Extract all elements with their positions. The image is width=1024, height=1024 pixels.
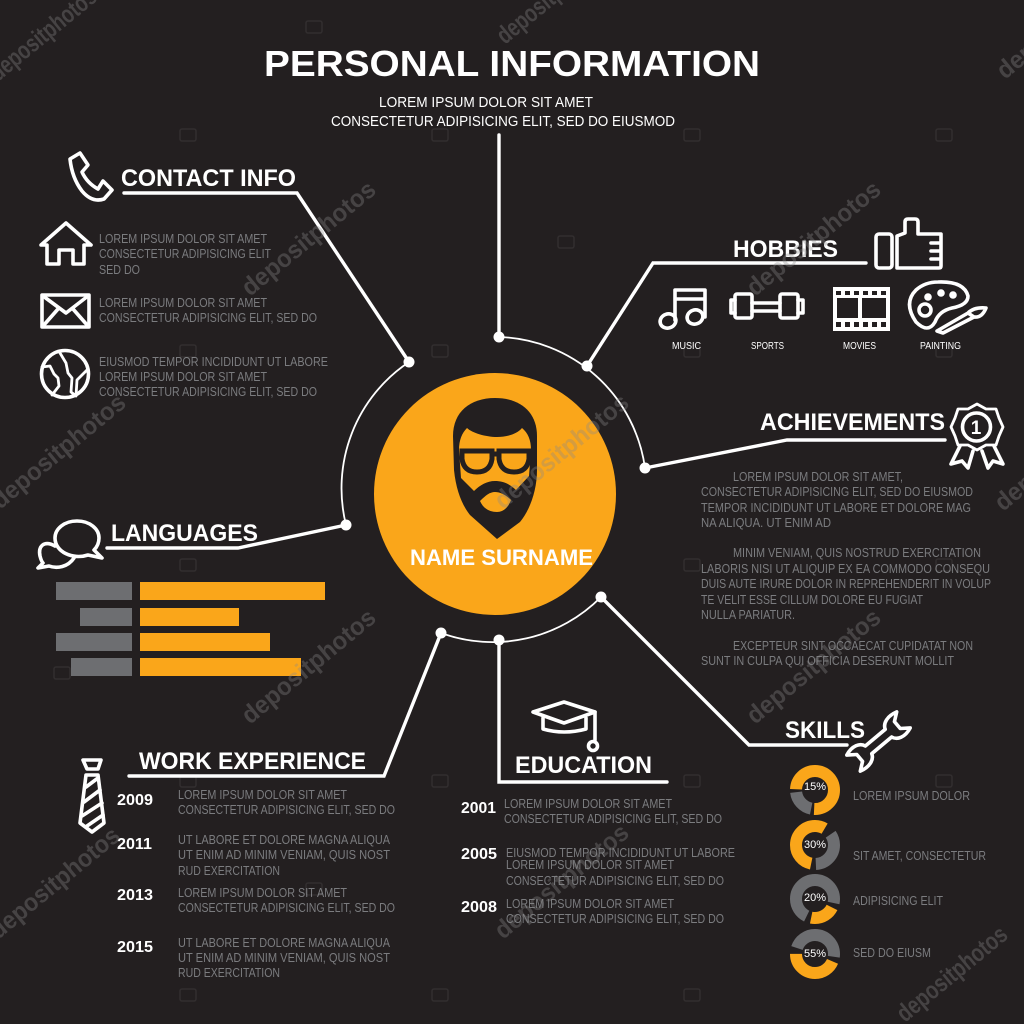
work descriptions: UT ENIM AD MINIM VENIAM, QUIS NOST: [178, 848, 390, 862]
donut chart: 55%: 55%: [804, 948, 826, 960]
connector ring arcs: [342, 337, 645, 642]
education years: 2005: [461, 846, 497, 863]
watermark text: depositphotos: [489, 388, 634, 515]
web text: LOREM IPSUM DOLOR SIT AMET: [99, 370, 267, 384]
heading: hobbies: HOBBIES: [733, 236, 838, 263]
icon: wrench: [845, 711, 912, 772]
panel: skills: [785, 711, 986, 973]
achievements text: SUNT IN CULPA QUI OFFICIA DESERUNT MOLLIT: [701, 654, 954, 668]
connector dots: [340, 332, 650, 646]
hobby labels: SPORTS: [751, 341, 784, 352]
donut chart: 20%: [796, 880, 834, 918]
address text: SED DO: [99, 263, 140, 277]
education descriptions: LOREM IPSUM DOLOR SIT AMET: [506, 897, 674, 911]
achievements text: CONSECTETUR ADIPISICING ELIT, SED DO EIUSMOD: [701, 485, 973, 499]
connector lines: [107, 135, 945, 782]
education descriptions: LOREM IPSUM DOLOR SIT AMET: [506, 858, 674, 872]
heading: achievements: ACHIEVEMENTS: [760, 409, 945, 436]
icon: dumbbell: [731, 294, 803, 318]
heading: work experience: WORK EXPERIENCE: [139, 748, 366, 775]
donut chart: 55%: [796, 935, 834, 973]
achievements text: NA ALIQUA. UT ENIM AD: [701, 516, 831, 530]
work descriptions: UT LABORE ET DOLORE MAGNA ALIQUA: [178, 833, 391, 847]
heading: contact info: CONTACT INFO: [121, 165, 296, 192]
education years: 2001: [461, 800, 496, 817]
work years: 2009: [117, 792, 153, 809]
heading: skills: SKILLS: [785, 717, 865, 744]
skill labels: SED DO EIUSM: [853, 946, 931, 960]
icon: phone: [70, 153, 112, 200]
address text: LOREM IPSUM DOLOR SIT AMET: [99, 232, 267, 246]
heading: languages: LANGUAGES: [111, 520, 258, 547]
email text: LOREM IPSUM DOLOR SIT AMET: [99, 296, 267, 310]
work years: 2011: [117, 836, 152, 853]
donut chart: 20%: 20%: [804, 892, 826, 904]
icon: thumbs up: [876, 219, 941, 268]
work descriptions: LOREM IPSUM DOLOR SIT AMET: [178, 886, 347, 900]
achievements text: LABORIS NISI UT ALIQUIP EX EA COMMODO CONSEQU: [701, 562, 990, 576]
icon: palette and brush: [910, 282, 986, 333]
panel: contact info: [41, 153, 328, 399]
web text: CONSECTETUR ADIPISICING ELIT, SED DO: [99, 385, 317, 399]
icon: bearded man with glasses: [453, 398, 537, 539]
education descriptions: CONSECTETUR ADIPISICING ELIT, SED DO: [506, 874, 724, 888]
skill labels: ADIPISICING ELIT: [853, 894, 943, 908]
watermark text: depositphotos: [489, 818, 634, 945]
achievements text: [701, 470, 991, 668]
watermark text: depositphotos: [741, 603, 886, 730]
work descriptions: CONSECTETUR ADIPISICING ELIT, SED DO: [178, 901, 395, 915]
work descriptions: UT LABORE ET DOLORE MAGNA ALIQUA: [178, 936, 391, 950]
work descriptions: RUD EXERCITATION: [178, 864, 280, 878]
work years: [117, 792, 153, 956]
hobby labels: PAINTING: [920, 341, 961, 352]
icon: film strip: [833, 287, 890, 331]
hobby labels: MUSIC: [672, 341, 701, 352]
subtitle: CONSECTETUR ADIPISICING ELIT, SED DO EIUSMOD: [331, 114, 675, 130]
heading: education: EDUCATION: [515, 752, 652, 779]
work years: 2013: [117, 887, 153, 904]
icon: music note: [658, 290, 705, 330]
education descriptions: CONSECTETUR ADIPISICING ELIT, SED DO: [504, 812, 722, 826]
hobby labels: MOVIES: [843, 341, 876, 352]
web text: EIUSMOD TEMPOR INCIDIDUNT UT LABORE: [99, 355, 328, 369]
name: NAME SURNAME: [410, 545, 593, 570]
icon: envelope: [42, 295, 89, 327]
work years: 2015: [117, 939, 153, 956]
education descriptions: LOREM IPSUM DOLOR SIT AMET: [504, 797, 672, 811]
skill labels: [853, 789, 986, 960]
email text: CONSECTETUR ADIPISICING ELIT, SED DO: [99, 311, 317, 325]
achievements text: TE VELIT ESSE CILLUM DOLORE EU FUGIAT: [701, 593, 923, 607]
icon: house: [41, 223, 91, 264]
icon: graduation cap: [533, 702, 598, 750]
panel: hobbies: [658, 219, 986, 352]
icon: globe: [42, 350, 88, 398]
panel: education: [461, 702, 735, 926]
work descriptions: CONSECTETUR ADIPISICING ELIT, SED DO: [178, 803, 395, 817]
work descriptions: UT ENIM AD MINIM VENIAM, QUIS NOST: [178, 951, 390, 965]
skill labels: LOREM IPSUM DOLOR: [853, 789, 970, 803]
address text: [99, 232, 271, 277]
work descriptions: [178, 788, 395, 980]
work descriptions: LOREM IPSUM DOLOR SIT AMET: [178, 788, 347, 802]
education descriptions: CONSECTETUR ADIPISICING ELIT, SED DO: [506, 912, 724, 926]
address text: CONSECTETUR ADIPISICING ELIT: [99, 247, 271, 261]
central profile panel: [374, 373, 616, 615]
watermark text: depositphotos: [236, 175, 381, 302]
icon: medal: 1: [971, 418, 982, 439]
watermark text: depositphotos: [236, 603, 381, 730]
achievements text: NULLA PARIATUR.: [701, 608, 795, 622]
skill labels: SIT AMET, CONSECTETUR: [853, 849, 986, 863]
watermark text: depositphotos: [741, 175, 886, 302]
icon: tie: [80, 760, 104, 832]
achievements text: LOREM IPSUM DOLOR SIT AMET,: [733, 470, 903, 484]
achievements text: TEMPOR INCIDIDUNT UT LABORE ET DOLORE MAG: [701, 501, 971, 515]
donut chart: 30%: [796, 826, 834, 864]
icon: medal: [951, 404, 1003, 468]
education descriptions: [504, 797, 735, 926]
subtitle: [331, 95, 675, 130]
achievements text: MINIM VENIAM, QUIS NOSTRUD EXERCITATION: [733, 546, 981, 560]
panel: achievements: [701, 404, 1003, 668]
donut chart: 15%: [796, 771, 834, 809]
donut chart: 15%: 15%: [804, 781, 826, 793]
education years: 2008: [461, 899, 497, 916]
achievements text: EXCEPTEUR SINT OCCAECAT CUPIDATAT NON: [733, 639, 973, 653]
title: PERSONAL INFORMATION: [264, 43, 760, 84]
panel: work experience: [80, 748, 395, 980]
donut chart: 30%: 30%: [804, 839, 826, 851]
web text: [99, 355, 328, 399]
work descriptions: RUD EXERCITATION: [178, 966, 280, 980]
hobby labels: [672, 341, 961, 352]
subtitle: LOREM IPSUM DOLOR SIT AMET: [379, 95, 593, 111]
education years: [461, 800, 497, 916]
language bar chart: [56, 582, 325, 676]
panel: languages: [38, 520, 325, 676]
icon: speech bubbles: [38, 521, 102, 568]
email text: [99, 296, 317, 325]
education descriptions: EIUSMOD TEMPOR INCIDIDUNT UT LABORE: [506, 846, 735, 860]
